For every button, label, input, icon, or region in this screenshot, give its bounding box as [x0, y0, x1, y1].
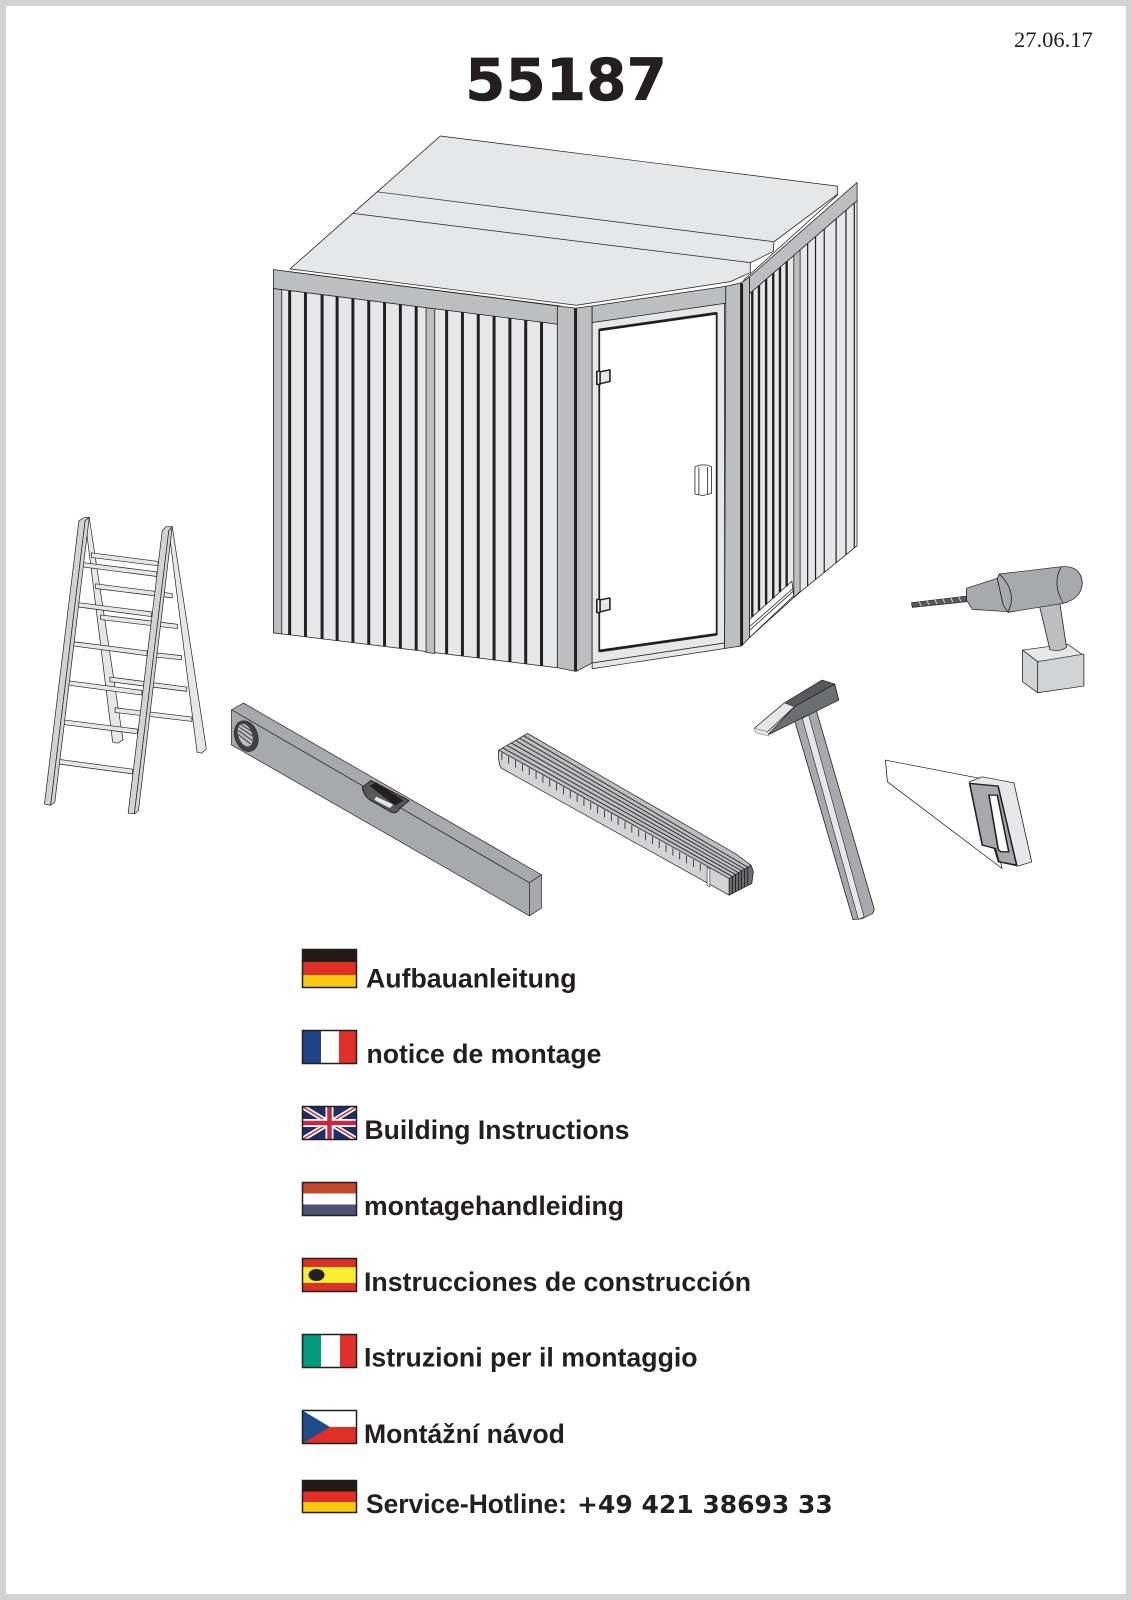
flag: Italy [302, 1334, 356, 1368]
head [754, 680, 839, 736]
handle [794, 710, 874, 920]
flag: Spain [302, 1258, 356, 1292]
legend: English [302, 1106, 630, 1145]
flag: Germany [302, 950, 356, 988]
illustration: shed [273, 136, 857, 671]
door handle [695, 465, 712, 496]
legend: Italian [302, 1334, 698, 1372]
illustration: hand saw [885, 760, 1032, 868]
rule end folds [729, 865, 753, 895]
flag: Netherlands [302, 1182, 356, 1216]
right wall [743, 182, 857, 638]
title: 55187 [465, 46, 667, 114]
roof [290, 136, 837, 305]
door hinge bottom [597, 598, 610, 612]
drill body [966, 567, 1082, 612]
legend: French: notice de montage [366, 1039, 601, 1069]
legend: Czech [302, 1410, 565, 1449]
illustration: cordless drill [911, 567, 1084, 693]
illustration: ladder [44, 517, 206, 814]
front rungs [58, 562, 157, 774]
left wall [273, 270, 561, 668]
service hotline [302, 1480, 833, 1519]
legend: Spanish [302, 1258, 751, 1297]
legend: Dutch [302, 1182, 624, 1221]
illustration: folding rule [499, 733, 753, 895]
legend: Czech: Montážní návod [364, 1419, 565, 1449]
flag: Czech Republic [302, 1410, 356, 1444]
drill bit [911, 596, 967, 607]
door hinge top [597, 370, 610, 384]
legend: Dutch: montagehandleiding [364, 1191, 624, 1221]
front rails [44, 517, 172, 814]
drill battery [1023, 644, 1084, 693]
saw handle [969, 777, 1032, 866]
flag: France [302, 1030, 356, 1064]
corner posts [557, 306, 592, 671]
drill handle [1039, 600, 1066, 651]
level vial end [230, 718, 262, 754]
illustration: spirit level [230, 703, 541, 916]
flag: United Kingdom [302, 1106, 356, 1140]
service hotline: +49 421 38693 33 [577, 1490, 833, 1519]
legend: Spanish: Instrucciones de construcción [364, 1267, 751, 1297]
legend: English: Building Instructions [364, 1115, 630, 1145]
date: 27.06.17 [1014, 27, 1093, 52]
level handle [362, 781, 409, 813]
illustration: hammer [754, 680, 874, 920]
legend: Italian: Istruzioni per il montaggio [364, 1342, 698, 1372]
flag: Germany [302, 1480, 356, 1512]
service hotline: Service-Hotline: [366, 1489, 567, 1519]
legend: German [302, 950, 577, 994]
legend: German: Aufbauanleitung [366, 964, 577, 994]
back rails and rungs [85, 517, 206, 753]
door wall [592, 277, 750, 669]
legend: French [302, 1030, 601, 1069]
